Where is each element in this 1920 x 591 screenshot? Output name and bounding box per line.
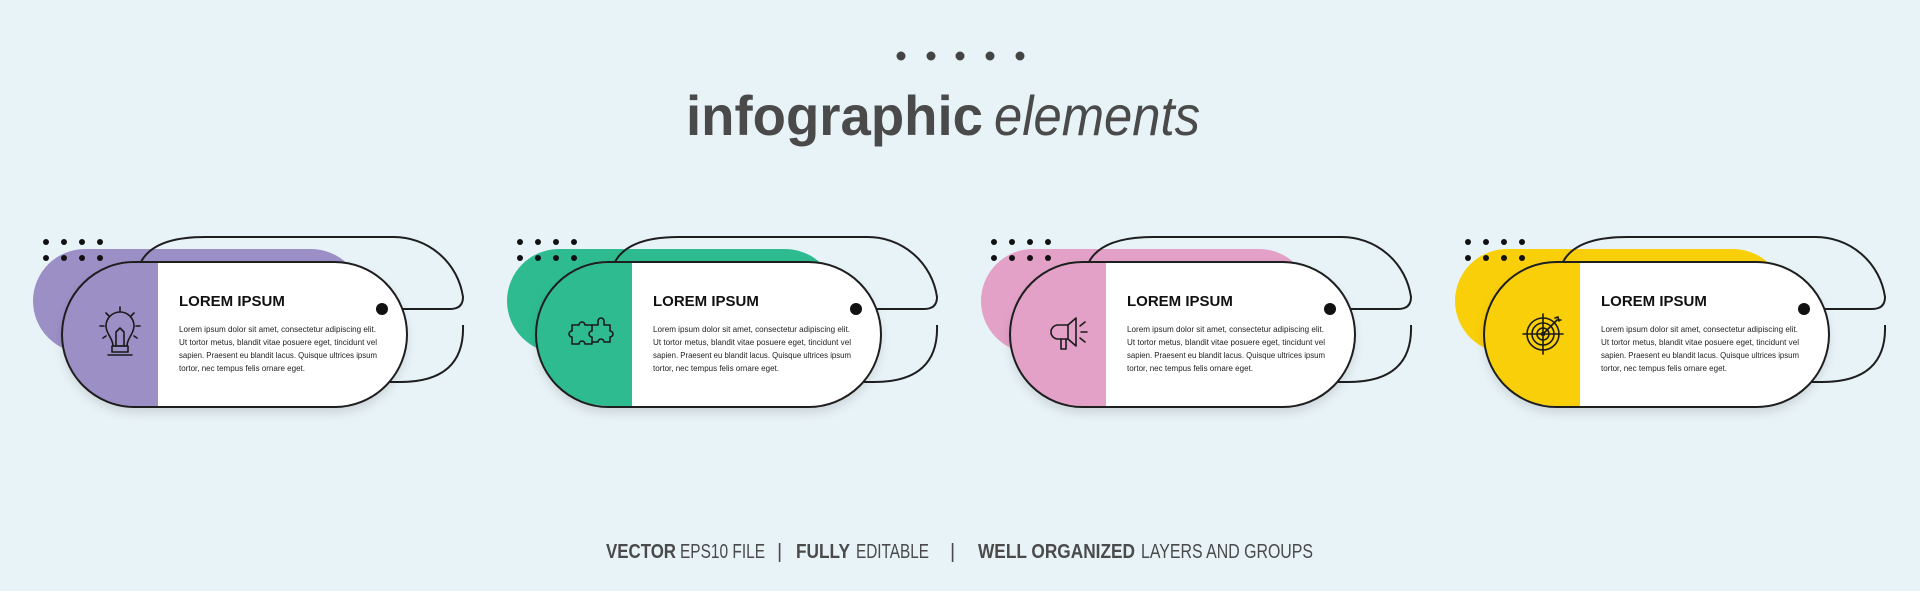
body text: tortor, nec tempus felis ornare eget. [653,363,779,373]
body text: tortor, nec tempus felis ornare eget. [1127,363,1253,373]
body text: Lorem ipsum dolor sit amet, consectetur adipiscing elit. [179,324,376,334]
title [686,84,1200,147]
heading: LOREM IPSUM [653,293,759,310]
dots [1465,239,1525,261]
footer: FULLY [796,541,851,563]
card 2: green [507,237,937,407]
footer: | [777,541,782,563]
dots [517,239,577,261]
title dots [896,52,1024,60]
body text: sapien. Praesent eu blandit lacus. Quisque ultrices ipsum [179,350,377,360]
body text: Ut tortor metus, blandit vitae posuere eget, tincidunt vel [179,337,377,347]
card 4: yellow [1455,237,1885,407]
body text: tortor, nec tempus felis ornare eget. [1601,363,1727,373]
footer: EDITABLE [856,541,929,563]
body text: tortor, nec tempus felis ornare eget. [179,363,305,373]
heading: LOREM IPSUM [1601,293,1707,310]
footer: VECTOR [606,541,676,563]
body text [179,324,377,373]
card 3: pink [981,237,1411,407]
body text: Lorem ipsum dolor sit amet, consectetur adipiscing elit. [1127,324,1324,334]
body text: Ut tortor metus, blandit vitae posuere eget, tincidunt vel [653,337,851,347]
footer: WELL ORGANIZED [978,541,1135,563]
body text [1601,324,1799,373]
title: elements [994,84,1200,147]
icon: target [1523,314,1563,354]
footer: EPS10 FILE [680,541,765,563]
icon: puzzle [569,318,613,344]
body text [1127,324,1325,373]
body text: sapien. Praesent eu blandit lacus. Quisque ultrices ipsum [1127,350,1325,360]
dots [43,239,103,261]
body text: Ut tortor metus, blandit vitae posuere eget, tincidunt vel [1601,337,1799,347]
footer [606,541,1313,563]
heading: LOREM IPSUM [179,293,285,310]
footer: | [950,541,955,563]
body text: Ut tortor metus, blandit vitae posuere eget, tincidunt vel [1127,337,1325,347]
body text: sapien. Praesent eu blandit lacus. Quisque ultrices ipsum [653,350,851,360]
icon: light bulb [100,307,140,355]
heading: LOREM IPSUM [1127,293,1233,310]
body text: Lorem ipsum dolor sit amet, consectetur adipiscing elit. [653,324,850,334]
footer: LAYERS AND GROUPS [1141,541,1313,563]
card 1: purple [33,237,463,407]
body text [653,324,851,373]
body text: Lorem ipsum dolor sit amet, consectetur adipiscing elit. [1601,324,1798,334]
icon: megaphone [1051,318,1087,349]
body text: sapien. Praesent eu blandit lacus. Quisque ultrices ipsum [1601,350,1799,360]
dots [991,239,1051,261]
title: infographic [686,84,983,147]
